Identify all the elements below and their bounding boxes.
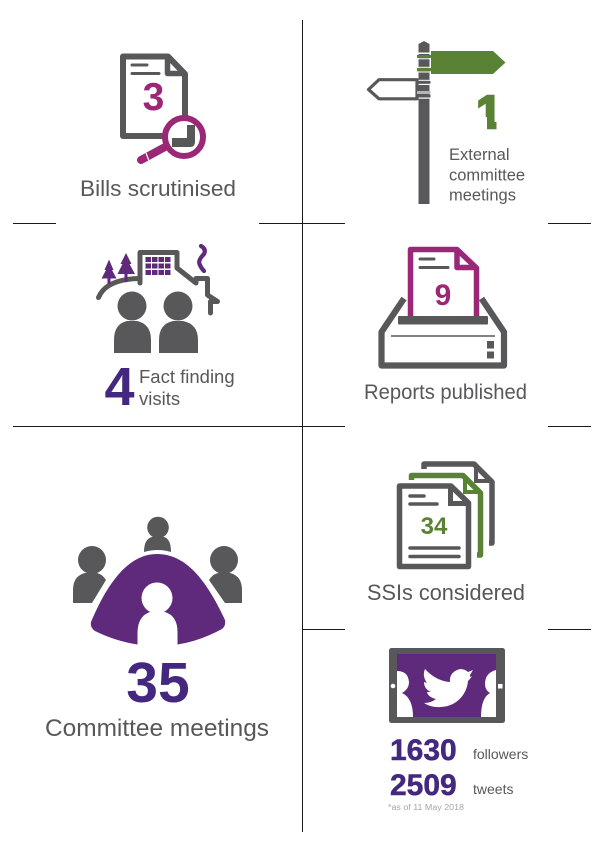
label: bills scrutinised: Bills scrutinised (80, 176, 236, 201)
number: 1 (470, 86, 508, 138)
stat: followers (390, 734, 528, 767)
panel: fact finding visits (98, 246, 235, 417)
panel: twitter (388, 648, 528, 812)
label: fact finding visits: Fact finding (139, 366, 235, 387)
icon: stack of documents (400, 464, 492, 566)
label: external committee meetings: External (449, 146, 510, 164)
panel: SSIs considered (367, 464, 525, 605)
label: external committee meetings: committee (449, 166, 525, 184)
icon: landscape with two people (98, 246, 218, 353)
number: 9: 9 (435, 279, 451, 312)
label: reports published: Reports published (364, 381, 527, 404)
number: 3: 3 (143, 76, 164, 119)
label: fact finding visits (139, 366, 235, 409)
icon: printer with report (382, 250, 504, 366)
stat: tweets: tweets (473, 781, 513, 797)
stat: followers: 1630 (390, 734, 457, 767)
label: external committee meetings (449, 146, 525, 204)
panel: external committee meetings (368, 41, 525, 204)
stat: tweets: 2509 (390, 769, 457, 802)
icon: signpost (368, 41, 506, 204)
icon: people round a table (73, 517, 242, 645)
panel: reports published (364, 250, 527, 404)
number: 35: 35 (126, 651, 190, 715)
panel: committee meetings (45, 517, 269, 742)
footnote: *as of 11 May 2018 (388, 803, 465, 812)
label: external committee meetings: meetings (449, 186, 516, 204)
number: 1: 1 (476, 86, 502, 138)
stat: tweets (390, 769, 513, 802)
icon: tablet with twitter bird (389, 648, 505, 723)
label: fact finding visits: visits (139, 388, 180, 409)
stat: followers: followers (473, 746, 528, 762)
label: committee meetings: Committee meetings (45, 715, 269, 742)
panel: bills scrutinised (80, 56, 236, 201)
number: 4: 4 (104, 357, 135, 417)
label: SSIs considered: SSIs considered (367, 580, 525, 605)
icon: document with magnifying glass (123, 56, 203, 161)
number: 34: 34 (421, 513, 448, 540)
